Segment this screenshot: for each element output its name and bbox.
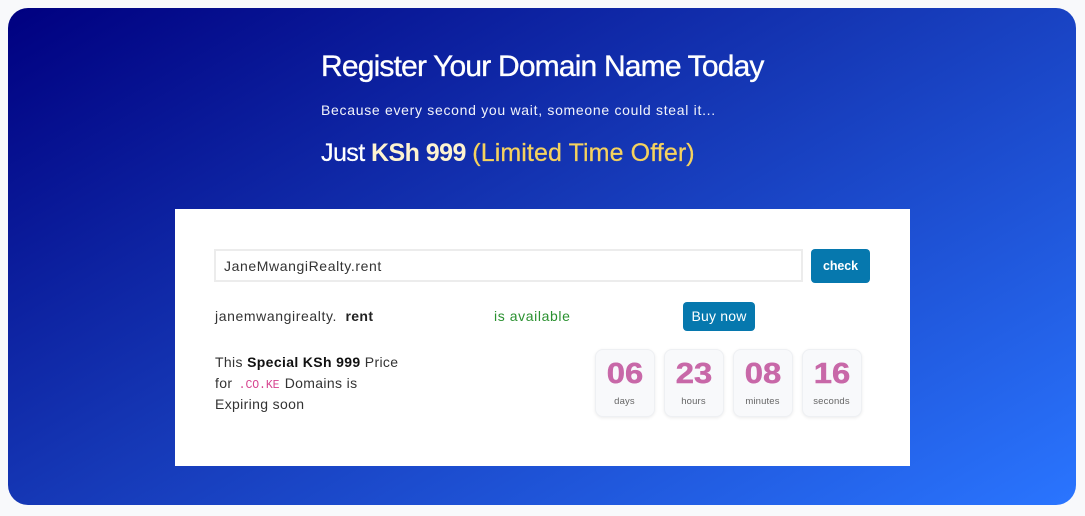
expiry note	[215, 354, 398, 412]
countdown: minutes: 08	[744, 358, 781, 390]
countdown: minutes: minutes	[745, 396, 780, 407]
domain name result: janemwangirealty. rent	[215, 308, 373, 324]
buy now button: Buy now	[691, 308, 747, 324]
subtitle: Because every second you wait, someone could steal it...	[321, 102, 716, 118]
availability status: is available	[494, 308, 570, 324]
domain input field: JaneMwangiRealty.rent	[224, 258, 382, 274]
title: Register Your Domain Name Today	[321, 50, 764, 83]
countdown: hours: hours	[681, 396, 706, 407]
check button	[811, 249, 870, 283]
buy now button	[683, 302, 755, 331]
countdown: minutes	[732, 349, 792, 417]
countdown: seconds	[802, 349, 862, 417]
panel: domain search card	[174, 209, 910, 466]
countdown: days: days	[614, 396, 635, 407]
check button: check	[823, 259, 858, 273]
countdown: seconds: 16	[813, 358, 850, 390]
countdown: hours	[664, 349, 724, 417]
countdown: days	[594, 349, 654, 417]
domain input field	[214, 249, 803, 282]
expiry note: This Special KSh 999 Price	[215, 354, 398, 370]
expiry note: Expiring soon	[215, 396, 304, 412]
price offer line: Just KSh 999 (Limited Time Offer)	[321, 139, 695, 167]
countdown: hours: 23	[675, 358, 712, 390]
countdown: days: 06	[606, 358, 643, 390]
countdown: seconds: seconds	[813, 396, 850, 407]
expiry note: for .CO.KE Domains is	[215, 375, 357, 392]
